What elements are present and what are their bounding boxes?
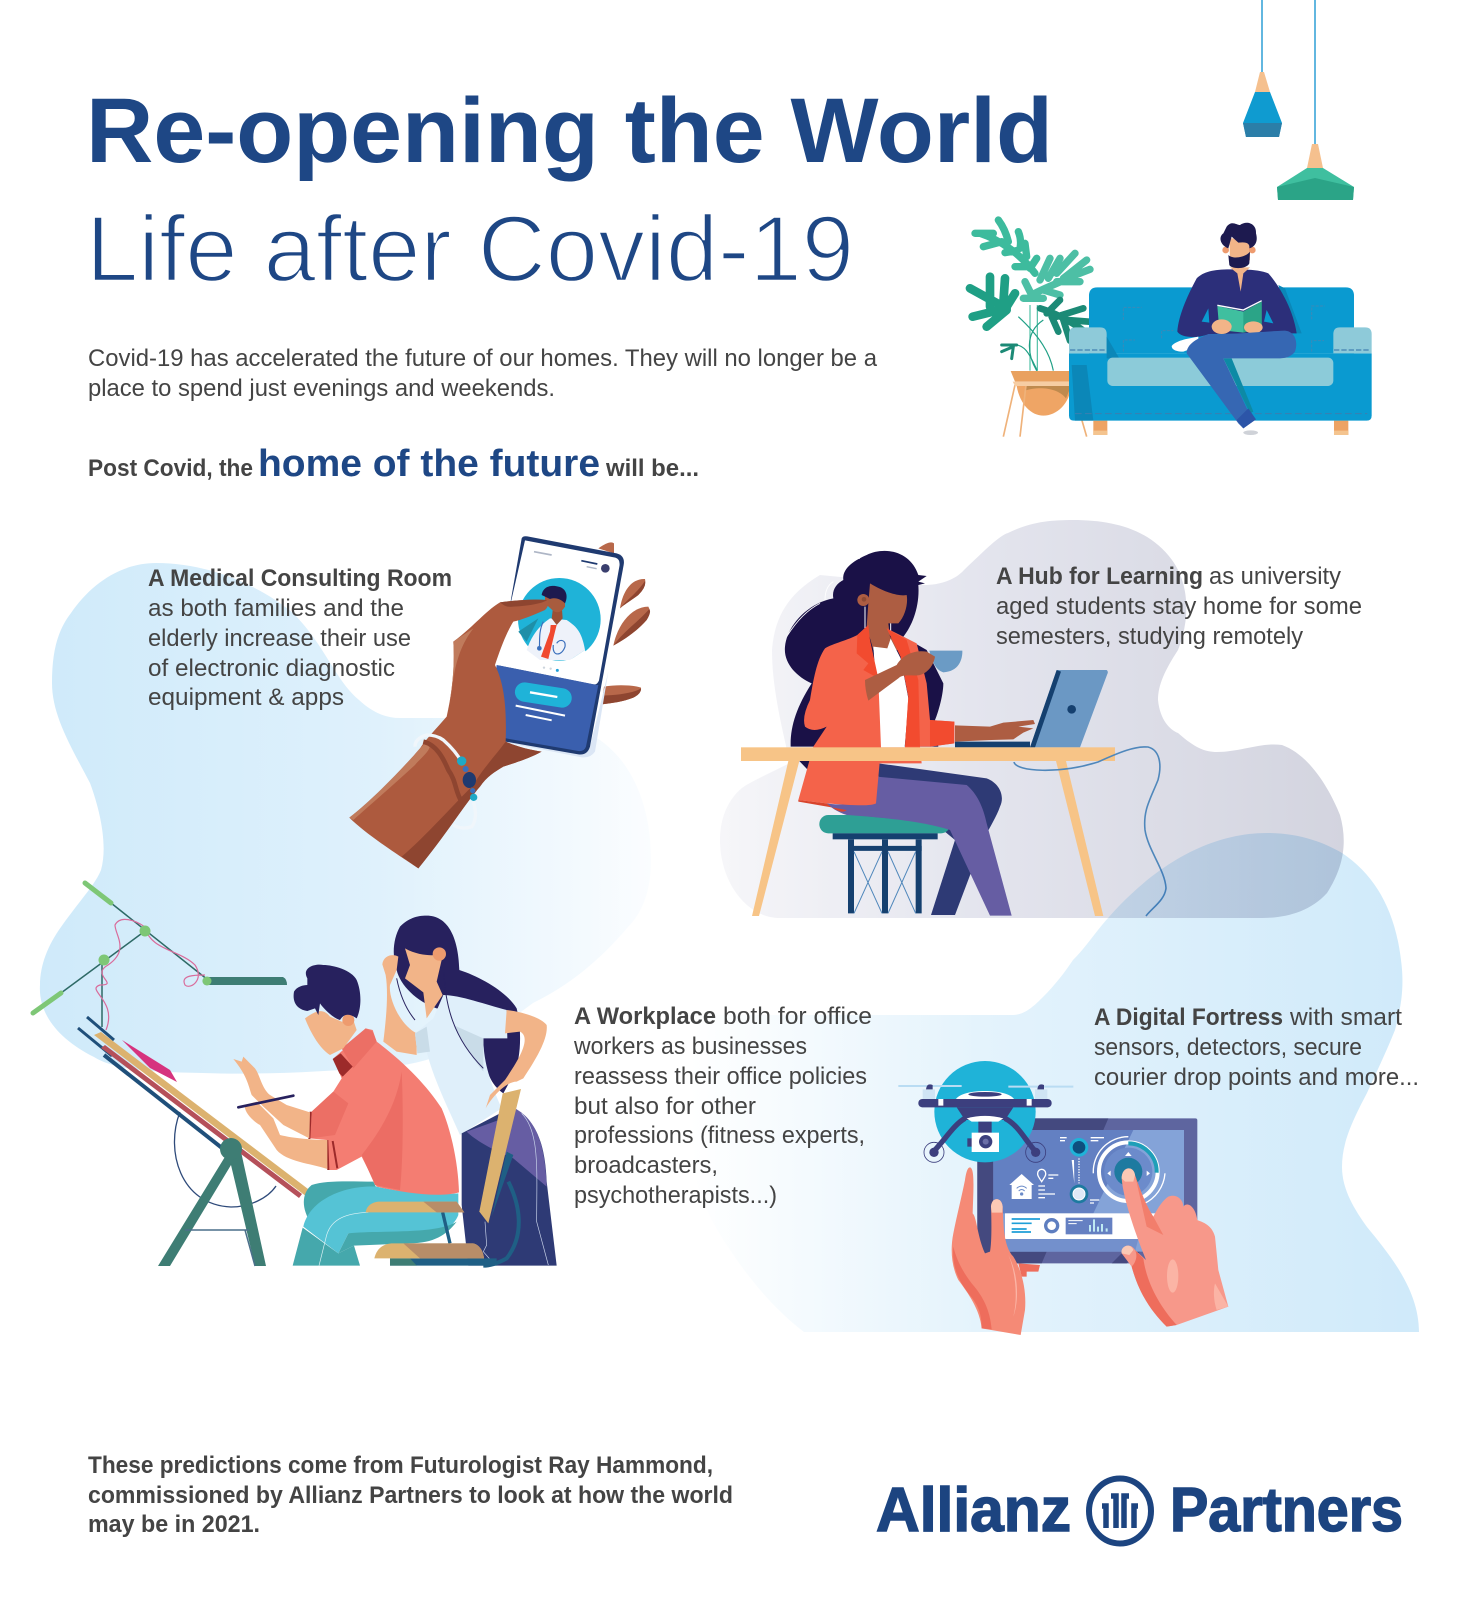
lead-in heading: will be...: [605, 455, 699, 482]
text: workplace: workers as businesses: [573, 1033, 807, 1060]
intro text: place to spend just evenings and weekends.: [88, 375, 555, 402]
jacket and shirt: [798, 625, 954, 812]
chair: [366, 1202, 497, 1266]
face: [857, 583, 907, 650]
title: Re-opening the World: [86, 80, 1053, 182]
intro text: [88, 345, 878, 402]
logo: Allianz Partners: [876, 1476, 1403, 1545]
text: medical consulting room: as both families and the: [148, 595, 404, 622]
lead-in heading: home of the future: [258, 443, 600, 485]
plant: [970, 220, 1090, 437]
text: medical consulting room: A Medical Consulting Room: [148, 565, 452, 592]
text: digital fortress: sensors, detectors, secure: [1094, 1034, 1362, 1061]
laptop: [955, 670, 1108, 747]
table: [741, 747, 1115, 916]
cup and raised arm: [865, 651, 962, 701]
text: workplace: broadcasters,: [574, 1152, 718, 1179]
panel: medical consulting room: [148, 536, 650, 868]
text: medical consulting room: of electronic diagnostic: [148, 655, 395, 682]
illustration: drafting lamp: [33, 883, 287, 1030]
text: medical consulting room: [148, 565, 452, 711]
text: hub for learning: aged students stay home for some: [996, 593, 1362, 620]
lead-in heading: [88, 443, 699, 485]
panel: hub for learning: [741, 551, 1362, 916]
text: workplace: but also for other: [574, 1093, 756, 1120]
text: digital fortress: A Digital Fortress: [1094, 1004, 1283, 1031]
illustration: drawing board: [78, 1017, 316, 1266]
legs and stool: [819, 763, 1012, 916]
left hand: [952, 1167, 1040, 1335]
intro text: Covid-19 has accelerated the future of our homes. They will no longer be a: [88, 345, 878, 372]
footer note: may be in 2021.: [88, 1511, 260, 1538]
illustration: hanging lamps: [1243, 0, 1354, 200]
sofa: [1069, 287, 1372, 435]
illustration: man reading on sofa with plant: [970, 220, 1372, 437]
illustration: hand holding phone: [349, 536, 650, 868]
hand: [349, 600, 548, 868]
cable: [1014, 747, 1166, 916]
man: [1172, 223, 1302, 435]
right hand: [1121, 1168, 1228, 1327]
hair: [785, 551, 943, 777]
text: medical consulting room: equipment & apps: [148, 684, 344, 711]
text: workplace: A Workplace: [574, 1003, 716, 1030]
fingers behind phone: [598, 542, 650, 704]
text: hub for learning: [996, 563, 1362, 650]
phone: [487, 536, 624, 757]
seated man: [233, 965, 459, 1266]
drone: [898, 1061, 1073, 1162]
illustration: woman at laptop: [741, 551, 1115, 916]
text: hub for learning: A Hub for Learning: [996, 563, 1203, 590]
text: workplace: both for office: [723, 1003, 872, 1030]
panel: workplace: [33, 883, 872, 1266]
footer note: commissioned by Allianz Partners to look at how the world: [88, 1482, 733, 1509]
blob: medical and workplace background: [40, 563, 651, 1074]
tablet: [977, 1118, 1197, 1263]
logo: Allianz Partners: Partners: [1170, 1476, 1403, 1545]
footer note: [88, 1452, 733, 1538]
forearm on keyboard: [955, 720, 1035, 742]
logo: Allianz Partners: Allianz: [876, 1476, 1071, 1545]
text: hub for learning: as university: [1209, 563, 1341, 590]
bracelet: [415, 735, 477, 828]
text: workplace: professions (fitness experts,: [574, 1122, 865, 1149]
text: workplace: psychotherapists...): [574, 1182, 777, 1209]
subtitle: Life after Covid-19: [86, 196, 854, 301]
blob: learning background: [720, 520, 1344, 918]
text: workplace: reassess their office policies: [574, 1063, 867, 1090]
text: digital fortress: courier drop points and more...: [1094, 1064, 1419, 1091]
text: digital fortress: [1094, 1004, 1419, 1091]
text: medical consulting room: elderly increase their use: [148, 625, 411, 652]
footer note: These predictions come from Futurologist Ray Hammond,: [88, 1452, 713, 1479]
illustration: two people at drawing board: [233, 916, 557, 1266]
text: workplace: [573, 1003, 872, 1209]
panel: digital fortress: [898, 1004, 1419, 1335]
text: digital fortress: with smart: [1289, 1004, 1402, 1031]
text: hub for learning: semesters, studying remotely: [996, 623, 1303, 650]
blob: digital fortress background: [692, 833, 1419, 1332]
panel: header: [86, 80, 1053, 485]
lead-in heading: Post Covid, the: [88, 455, 253, 482]
icon: Allianz eagle roundel: [1089, 1478, 1151, 1544]
standing woman: [382, 916, 557, 1266]
illustration: drone and tablet held in hands: [898, 1061, 1228, 1335]
